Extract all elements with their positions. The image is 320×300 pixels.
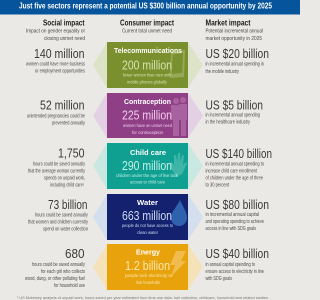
social stat: 73 billion: hours could be saved annually [35, 212, 88, 218]
panel: water: clean water [137, 230, 158, 236]
column: market impact heading: Market impact [206, 18, 251, 28]
column: consumer impact heading: Consumer impact [120, 18, 174, 28]
panel: child care [93, 143, 203, 189]
social stat: 1,750: that the average woman currently [28, 168, 85, 174]
panel: child care: access to child care [130, 180, 165, 186]
market stat: US $80 billion: in incremental annual capital [206, 212, 259, 218]
column: market impact heading: Potential incremental annual [206, 28, 263, 34]
panel: contraception [93, 93, 203, 138]
column: market impact heading [206, 18, 263, 42]
market stat: US $20 billion: US $20 billion [206, 46, 269, 61]
panel: contraception: Contraception [124, 97, 171, 106]
column: social impact heading [26, 18, 85, 42]
social stat: 140 million: 140 million [34, 46, 84, 61]
market stat: US $20 billion: in incremental annual spending in [206, 62, 264, 68]
panel: energy: their households [136, 280, 160, 286]
social stat: 52 million: 52 million [40, 98, 84, 112]
social stat: 73 billion: 73 billion [48, 197, 88, 212]
social stat: 73 billion: that women and children currently [28, 220, 88, 226]
social stat: 52 million: prevented annually [52, 120, 85, 126]
panel: energy: Energy [136, 248, 161, 256]
panel: water [93, 194, 203, 240]
icon: hand [170, 153, 187, 177]
market stat: US $140 billion [206, 146, 272, 188]
panel: energy [93, 244, 203, 290]
market stat: US $140 billion: US $140 billion [206, 146, 272, 161]
market stat: US $5 billion: in incremental annual spending [206, 112, 260, 118]
social stat: 680: for each girl who collects [41, 269, 85, 275]
footnote: ¹ US Mckinsey analysis of unpaid work; hours saved per year estimated from time-use data, fuel collection, childcare, household and related studies [17, 296, 268, 300]
social stat: 680 [25, 246, 85, 289]
market stat: US $40 billion: ensure access to electricity in line [206, 269, 264, 275]
social stat: 680: wood, dung, or other polluting fuel [25, 276, 85, 282]
panel: telecommunications [93, 42, 203, 88]
social stat: 680: 680 [65, 246, 84, 261]
icon: two people [171, 97, 187, 136]
market stat: US $140 billion: increase child care enrollment [206, 168, 257, 174]
social stat: 52 million [27, 98, 85, 126]
social stat: 140 million: women could have more business [26, 62, 85, 68]
panel: contraception: women have an unmet need [123, 123, 172, 129]
column: social impact heading: Social impact [43, 18, 85, 28]
panel: energy: 1.2 billion [125, 258, 170, 273]
panel: energy: people lack electricity at [125, 273, 173, 279]
market stat: US $40 billion: in annual capital spending to [206, 262, 255, 268]
column: consumer impact heading [120, 18, 174, 34]
market stat: US $20 billion [206, 46, 269, 75]
icon: water drop [171, 200, 187, 226]
market stat: US $140 billion: in incremental annual spending to [206, 162, 264, 168]
panel: child care: children under the age of five lack [116, 173, 179, 179]
panel: telecommunications: 200 million [122, 58, 172, 72]
panel: child care: Child care [130, 148, 166, 157]
column: social impact heading: Impact on gender equality or [26, 28, 85, 34]
social stat: 73 billion [28, 197, 88, 232]
social stat: 73 billion: spend on water collection [43, 226, 88, 232]
social stat: 1,750: 1,750 [58, 146, 84, 160]
icon: lightning bolt [170, 251, 186, 277]
column: market impact heading: market opportunity in 2025 [206, 36, 262, 42]
panel: telecommunications: mobile phones globally [127, 80, 167, 86]
market stat: US $140 billion: of children under the age of three [206, 176, 263, 182]
market stat: US $80 billion [206, 197, 269, 232]
market stat: US $20 billion: the mobile industry [206, 69, 239, 75]
panel: child care: 290 million [122, 158, 172, 173]
market stat: US $40 billion: with SDG goals [206, 276, 232, 282]
social stat: 140 million [26, 46, 85, 74]
panel: water: 663 million [122, 208, 172, 223]
market stat: US $5 billion [206, 98, 263, 126]
panel: contraception: 225 million [122, 108, 172, 122]
social stat: 680: for household use [54, 283, 85, 289]
social stat: 1,750: spends on unpaid work, [44, 176, 85, 182]
column: social impact heading: closing unmet need [44, 36, 85, 42]
market stat: US $80 billion: access in line with SDG goals [206, 226, 256, 232]
market stat: US $40 billion: US $40 billion [206, 246, 269, 261]
column: consumer impact heading: Current total unmet need [122, 28, 172, 34]
market stat: US $80 billion: US $80 billion [206, 197, 269, 212]
panel: telecommunications: fewer women than men with [123, 72, 171, 78]
market stat: US $5 billion: in the healthcare industry [206, 120, 250, 126]
social stat: 140 million: or employment opportunities [35, 68, 85, 74]
social stat: 1,750: including child care¹ [50, 182, 84, 188]
panel: contraception: for contraception [132, 130, 163, 136]
market stat: US $5 billion: US $5 billion [206, 98, 263, 112]
header banner [0, 0, 300, 14]
market stat: US $40 billion [206, 246, 269, 282]
social stat: 1,750 [28, 146, 85, 188]
social stat: 680: hours could be saved annually [32, 262, 85, 268]
social stat: 1,750: hours could be saved annually [33, 162, 85, 168]
icon: mobile phone [170, 50, 185, 78]
market stat: US $80 billion: and operating spending to achieve [206, 219, 264, 225]
market stat: US $140 billion: to 30 percent [206, 182, 229, 188]
social stat: 52 million: unintended pregnancies could be [27, 114, 85, 120]
panel: telecommunications: Telecommunications [114, 46, 182, 55]
panel: water: Water [137, 198, 158, 207]
panel: water: people do not have access to [122, 223, 173, 229]
